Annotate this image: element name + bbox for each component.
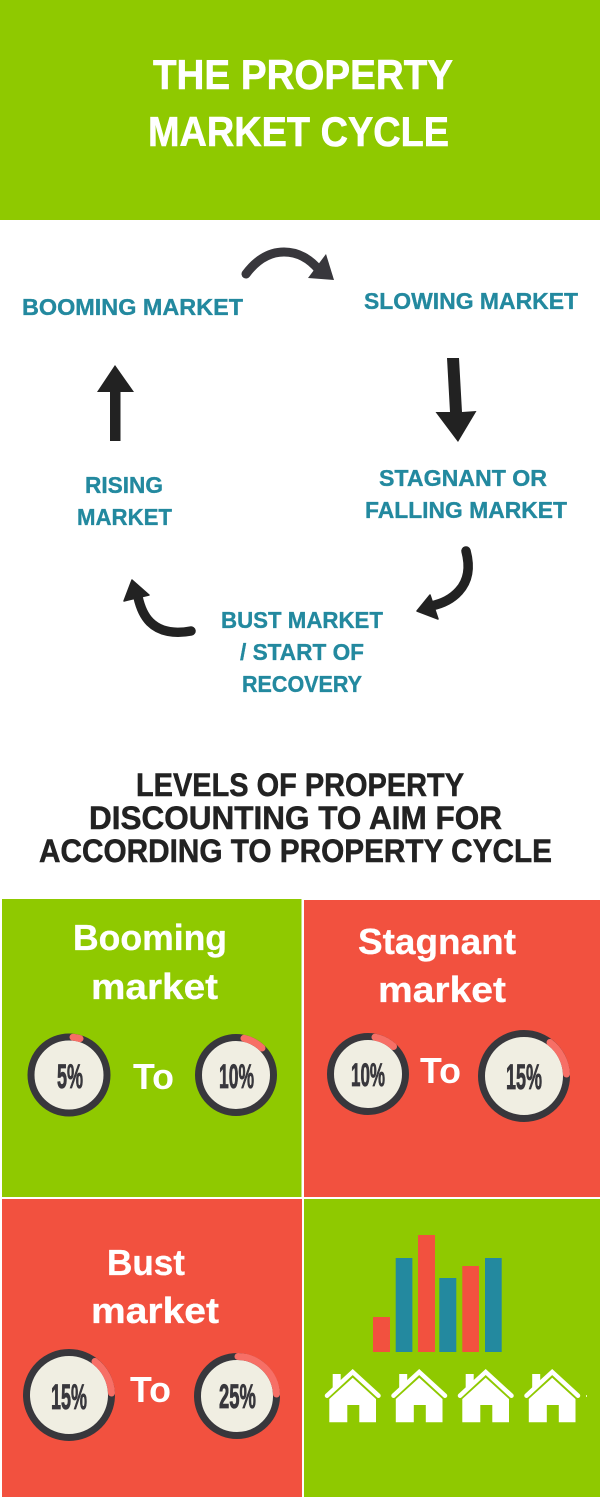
gauge: 15%: 15%	[506, 1058, 542, 1097]
panel heading: market	[91, 966, 218, 1007]
title banner	[0, 0, 600, 220]
label: bust market	[221, 607, 383, 697]
title: THE PROPERTY	[153, 51, 453, 98]
icon: house 3	[460, 1372, 512, 1422]
panel heading	[358, 921, 516, 1010]
label: slowing market: SLOWING MARKET	[364, 288, 578, 314]
panel heading: Bust	[107, 1242, 185, 1283]
panel: bust market	[2, 1199, 302, 1497]
panel heading: Stagnant	[358, 921, 516, 962]
label: rising market	[77, 472, 172, 530]
arrow: booming to slowing	[246, 252, 334, 280]
panel heading: market	[91, 1290, 219, 1331]
label: rising market: RISING	[85, 472, 163, 498]
title: MARKET CYCLE	[148, 108, 449, 155]
heading: discount levels: LEVELS OF PROPERTY	[136, 767, 464, 803]
label: bust market: RECOVERY	[242, 671, 362, 697]
icon: house 1	[327, 1372, 378, 1422]
gauge: 10%	[198, 1038, 274, 1112]
label: bust market: BUST MARKET	[221, 607, 383, 633]
panel: stagnant market	[304, 900, 600, 1197]
arrow: rising to booming	[97, 365, 134, 441]
cycle diagram	[22, 252, 578, 697]
icon: house 4	[526, 1372, 578, 1422]
gauge: 5%: 5%	[57, 1058, 83, 1096]
label: bust market: / START OF	[240, 639, 364, 665]
panel heading: Booming	[73, 917, 227, 958]
title	[148, 51, 453, 155]
panel heading	[73, 917, 227, 1007]
label: stagnant or falling market: STAGNANT OR	[379, 465, 547, 491]
gauge: 25%	[198, 1356, 276, 1436]
arrow: slowing to stagnant	[436, 358, 476, 442]
gauge: 25%: 25%	[219, 1378, 256, 1416]
icon: house 2	[394, 1372, 445, 1422]
gauge: 15%: 15%	[51, 1378, 87, 1417]
gauge: 5%	[31, 1037, 107, 1113]
gauge: 15%	[26, 1352, 112, 1438]
bar chart	[373, 1235, 502, 1352]
gauge: 10%: 10%	[351, 1057, 385, 1093]
heading: discount levels	[39, 767, 552, 869]
connector word: To	[420, 1050, 461, 1091]
connector word: To	[130, 1369, 171, 1410]
panel heading	[91, 1242, 219, 1331]
label: stagnant or falling market: FALLING MARKET	[365, 497, 567, 523]
heading: discount levels: ACCORDING TO PROPERTY CYCLE	[39, 833, 552, 869]
heading: discount levels: DISCOUNTING TO AIM FOR	[89, 800, 502, 836]
panel: chart and houses	[304, 1199, 600, 1497]
arrow: stagnant to bust	[417, 551, 468, 619]
gauge: 10%: 10%	[219, 1058, 254, 1096]
panel heading: market	[378, 969, 506, 1010]
gauge: 10%	[330, 1036, 406, 1112]
panel: booming market	[2, 899, 302, 1197]
arrow: bust to rising	[124, 580, 191, 632]
label: rising market: MARKET	[77, 504, 172, 530]
label: booming market: BOOMING MARKET	[22, 294, 243, 320]
label: stagnant or falling market	[365, 465, 567, 523]
gauge: 15%	[482, 1034, 566, 1118]
connector word: To	[133, 1056, 174, 1097]
